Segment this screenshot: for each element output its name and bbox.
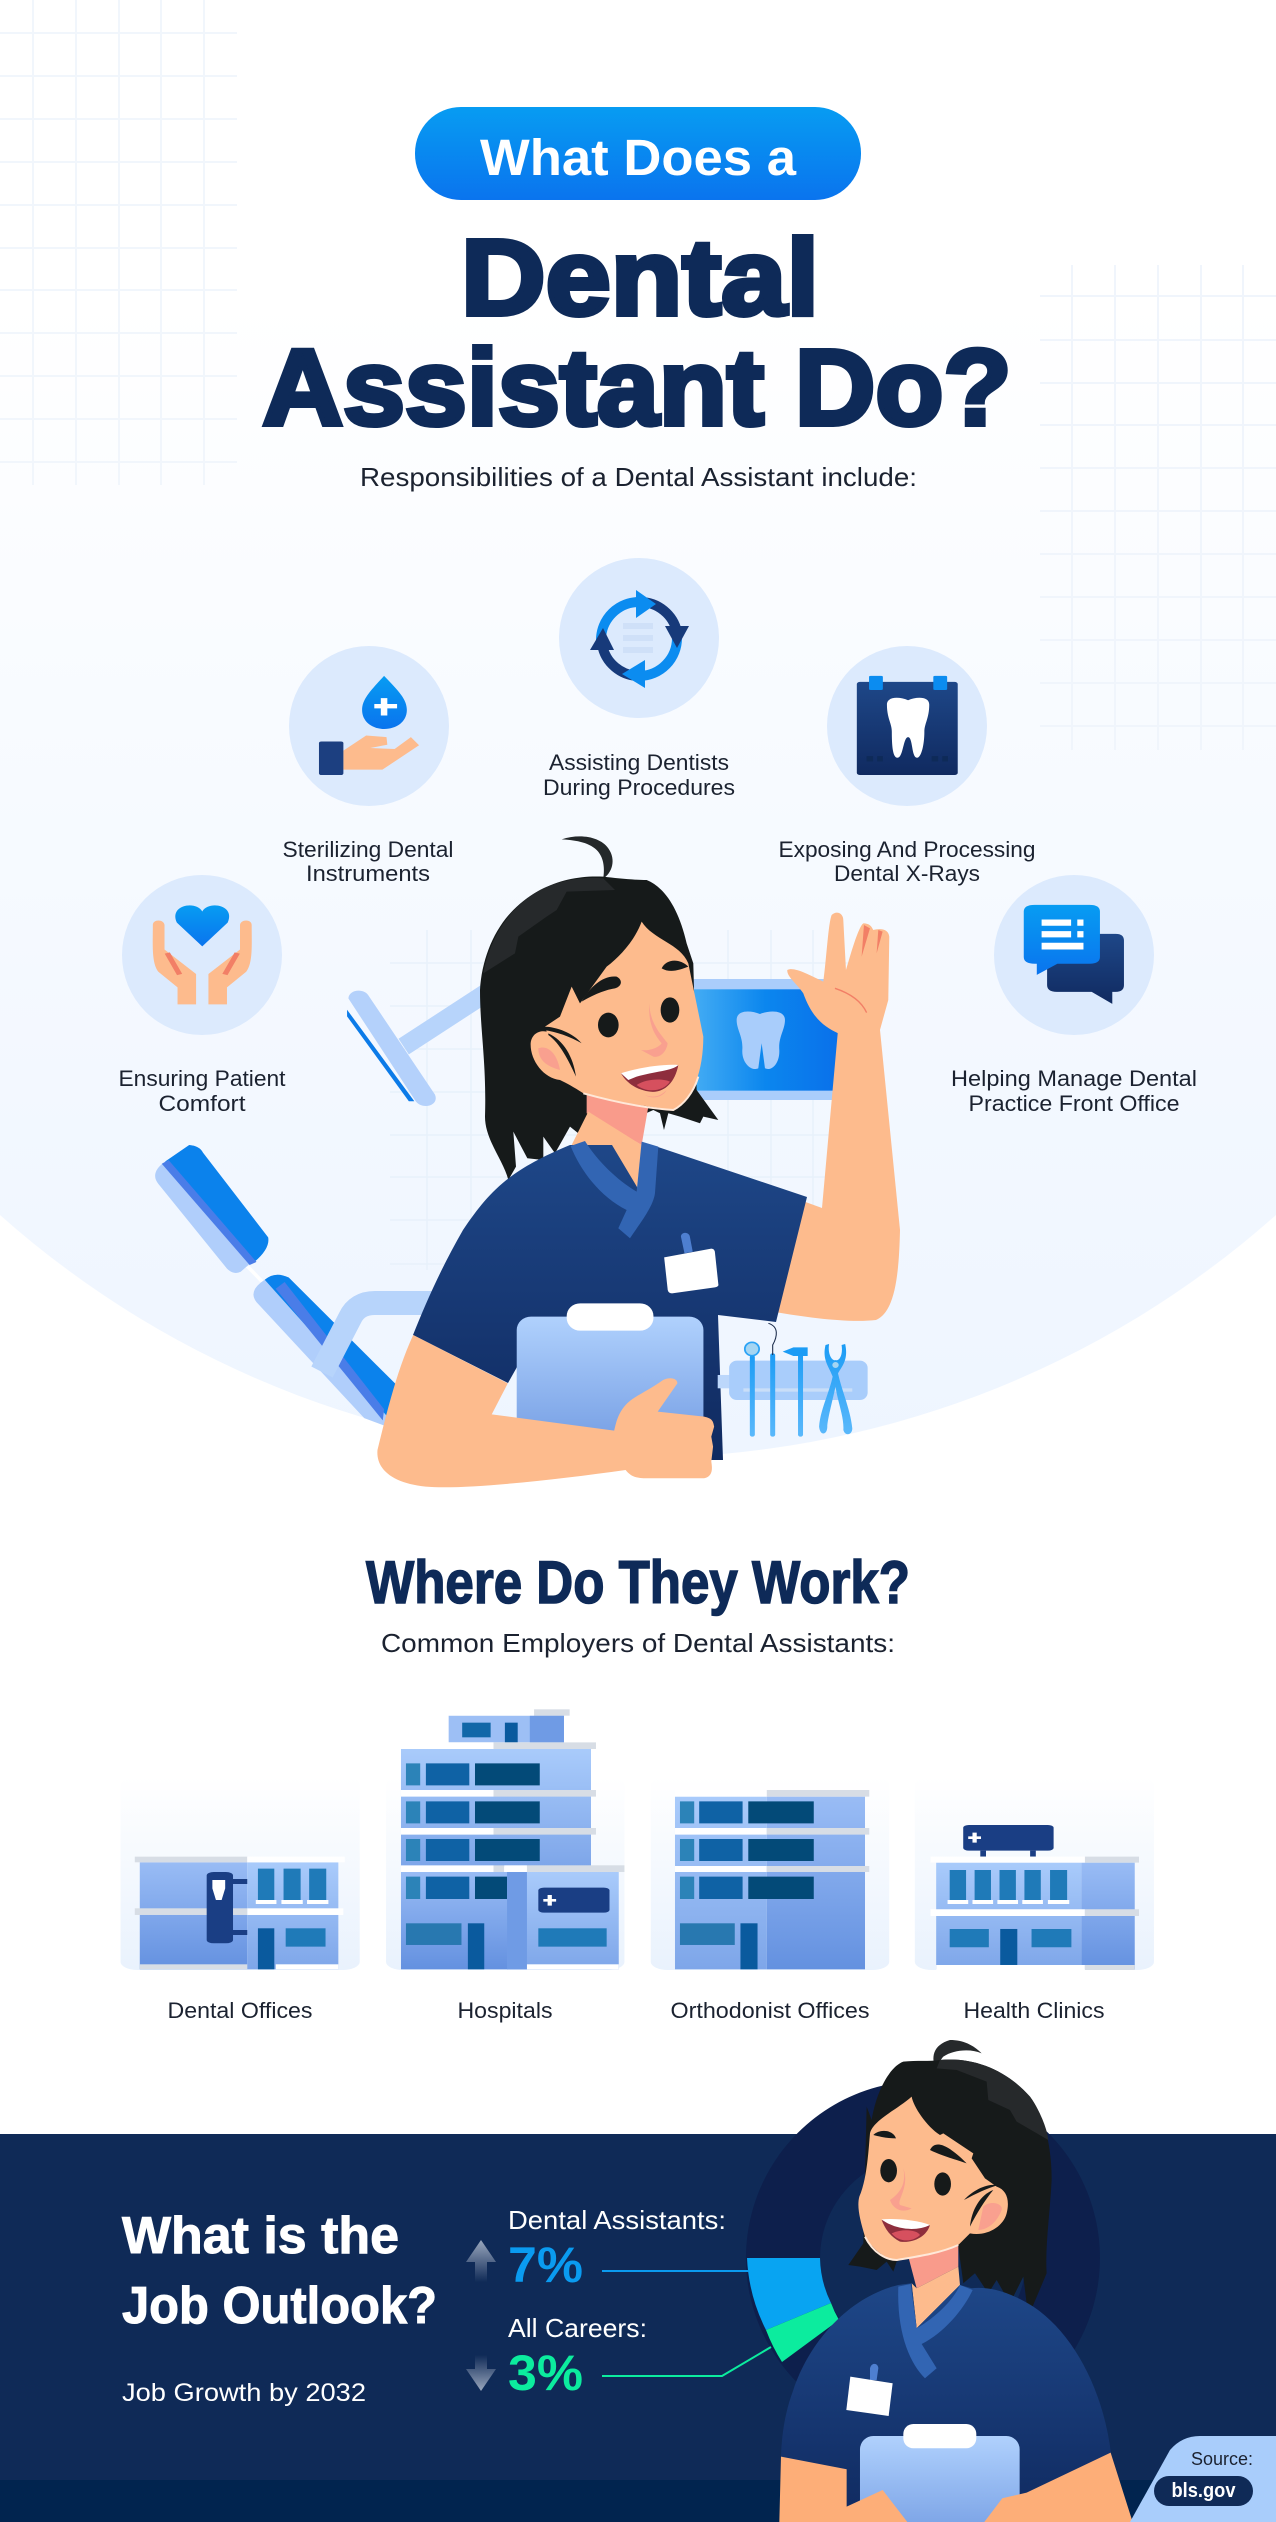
source card [1130,2436,1276,2522]
stat: all careers 3%: 3% [508,2345,583,2401]
responsibility labels: Ensuring Patient [118,1066,286,1091]
icon: chat bubbles [1024,905,1124,1004]
illustration: dental assistant bust [779,2040,1133,2522]
stat: dental assistants 7%: Dental Assistants: [508,2205,726,2235]
dental chair [155,1145,399,1426]
building labels: Hospitals [458,1998,552,2023]
responsibility labels: Instruments [306,861,430,886]
responsibility labels: Practice Front Office [968,1091,1180,1116]
instrument tray [718,1323,868,1437]
responsibility labels [118,750,1197,1116]
source card: Source: [1191,2449,1253,2469]
illustration: dental assistant at chair [155,836,900,1487]
building cards row [121,1709,1154,1970]
stat: dental assistants 7% [466,2205,749,2293]
raised arm [775,1030,900,1321]
title: Assistant Do? [262,326,1012,448]
building labels: Orthodonist Offices [670,1998,870,2023]
clipboard [517,1303,703,1433]
chair armrest [322,1303,445,1372]
panel: job outlook [0,2134,1276,2522]
heading: where do they work: Where Do They Work? [366,1549,910,1616]
responsibility labels: Dental X-Rays [834,861,980,886]
subtitle: Responsibilities of a Dental Assistant include: [360,462,917,492]
name badge [846,2364,893,2416]
scrubs top [781,2283,1111,2522]
subheading: common employers: Common Employers of Dental Assistants: [381,1628,895,1658]
responsibility labels: Assisting Dentists [549,750,729,775]
icon: heart in hands [153,905,252,1004]
source card: bls.gov [1172,2480,1236,2502]
grid pattern: top left [0,0,237,485]
donut chart [746,2081,1100,2435]
face [531,922,703,1110]
heading pill [415,107,861,200]
tooth monitor [690,979,840,1100]
building: health clinic [915,1777,1154,1970]
arm holding clipboard [377,1335,714,1487]
title [262,216,1012,448]
page background with curved blue panel [0,300,1276,1458]
responsibility labels: Comfort [158,1091,246,1116]
neck [572,1093,648,1192]
job outlook heading: What is the [122,2207,399,2265]
name badge [664,1233,718,1293]
hair [480,836,718,1180]
heading pill: What Does a [480,129,797,186]
icon: water drop and hand [319,676,419,775]
building labels: Dental Offices [168,1998,312,2023]
stat: all careers 3%: All Careers: [508,2313,647,2343]
building labels: Health Clinics [964,1998,1104,2023]
building: orthodontist office [651,1777,889,1970]
face [858,2097,1008,2260]
responsibility labels: Exposing And Processing [778,837,1036,862]
icon: dental x-ray [857,676,958,775]
clipboard [860,2424,1020,2522]
job outlook heading [122,2207,437,2335]
building labels [168,1998,1104,2023]
responsibility labels: Sterilizing Dental [282,837,454,862]
job outlook heading: Job Outlook? [122,2277,437,2335]
building: dental office [121,1777,360,1970]
arms [779,2453,1133,2522]
raised hand [787,913,889,1033]
hair [848,2040,1052,2317]
stat: dental assistants 7%: 7% [508,2237,583,2293]
neck [908,2243,960,2328]
scrubs collar [571,1141,658,1238]
job growth caption: Job Growth by 2032 [122,2379,366,2407]
stat: all careers 3% [466,2313,771,2401]
icon circles [122,558,1154,1035]
responsibility labels: During Procedures [543,775,735,800]
responsibility labels: Helping Manage Dental [951,1066,1197,1091]
scrubs top [413,1145,807,1460]
building: hospital [386,1709,624,1970]
title: Dental [461,216,819,338]
icon: cycle arrows [590,590,689,688]
grid pattern: top right [1040,265,1276,750]
dental lamp [347,985,481,1106]
